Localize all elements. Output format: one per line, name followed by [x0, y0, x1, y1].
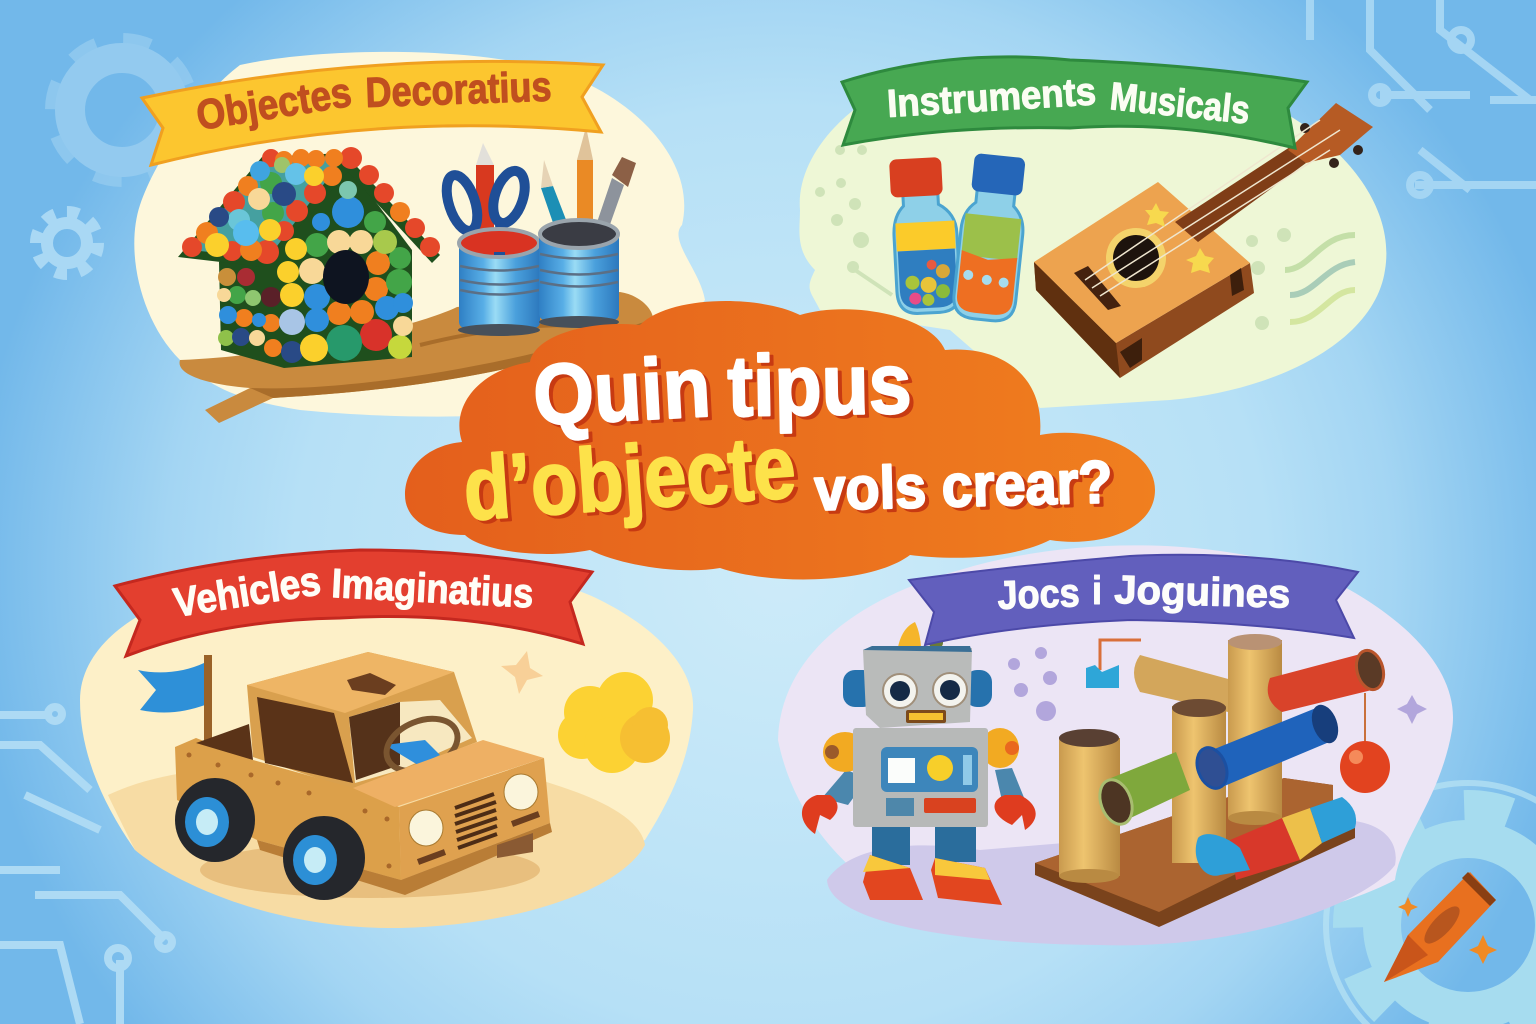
birdhouse: [178, 147, 440, 368]
panel: instruments musicals: [799, 57, 1386, 408]
panel: objectes decoratius: [134, 52, 705, 423]
circuit lines top right: [1310, 0, 1536, 195]
decorative dots and waves: [815, 145, 1355, 330]
panel: vehicles imaginatius: [80, 550, 693, 928]
red tube: [1268, 647, 1388, 712]
panel background: [134, 52, 705, 417]
robot feet: [863, 855, 1002, 905]
banner: jocs i joguines: i: [1092, 569, 1102, 613]
strings: [1085, 120, 1340, 296]
robot shoulders: [823, 728, 1019, 772]
robot legs: [872, 822, 976, 865]
paintbrush: [590, 157, 636, 247]
panel background: [799, 62, 1386, 408]
banner: objectes decoratius: Decoratius: [365, 63, 552, 116]
title: Quin: [531, 339, 713, 444]
robot: [802, 622, 1036, 905]
yellow splat: [558, 672, 670, 773]
wheel: front: [283, 816, 365, 900]
title: d’objecte: [460, 417, 799, 540]
cloud shape: [405, 301, 1155, 579]
banner: instruments musicals: Instruments: [886, 70, 1097, 126]
front panel: [399, 758, 550, 880]
icon: large gear top left: [56, 44, 188, 176]
central title cloud: [405, 301, 1155, 579]
banner: jocs i joguines: Jocs: [997, 571, 1080, 618]
panel: jocs i joguines: [778, 545, 1453, 945]
banner: vehicles imaginatius: [115, 550, 592, 656]
cardboard tube marble run: [1035, 634, 1390, 927]
banner: jocs i joguines: Joguines: [1114, 568, 1291, 617]
orange pencil: [577, 127, 593, 243]
banner: instruments musicals: Musicals: [1108, 75, 1252, 133]
bottle: red cap: [889, 156, 961, 315]
robot body: [853, 728, 988, 827]
wooden base: [1035, 778, 1355, 927]
scissors: [441, 167, 531, 250]
neck and headstock: [1175, 103, 1373, 242]
steering wheel: [379, 709, 465, 781]
side panel: [175, 738, 401, 880]
hood: [353, 740, 544, 807]
cardboard car: [138, 652, 552, 900]
sound hole: [1106, 228, 1166, 288]
red marker: [476, 143, 494, 235]
cigar box guitar: [1034, 103, 1373, 378]
panel background: [778, 545, 1453, 940]
small marble run icon: [1086, 640, 1141, 688]
title: [460, 336, 1113, 540]
headlights: [409, 774, 538, 846]
icon: crayon: [1384, 872, 1497, 982]
tan tube: front: [1059, 729, 1120, 883]
title: vols crear?: [814, 448, 1113, 523]
banner: jocs i joguines: [909, 555, 1358, 645]
tan tube: tall: [1228, 634, 1282, 825]
guitar stars: [1145, 203, 1214, 273]
grille: [455, 794, 497, 848]
robot head: [843, 622, 992, 728]
bottle: blue cap: [952, 152, 1031, 323]
sand ground: [108, 770, 645, 928]
right can: [539, 220, 619, 328]
icon: small gear left: [36, 212, 98, 274]
hanging ornament: [1340, 693, 1390, 793]
banner: instruments musicals: [842, 57, 1307, 148]
blue tube: [1192, 701, 1343, 793]
wooden shelf: [180, 292, 653, 423]
banner: vehicles imaginatius: Imaginatius: [331, 560, 535, 617]
circuit lines bottom left: [0, 707, 172, 1024]
teal pencil: [541, 160, 575, 246]
panel background: [80, 567, 693, 928]
striped tube: [1196, 797, 1356, 880]
decorative shapes: [1008, 647, 1427, 724]
wheel: rear: [175, 778, 255, 862]
green tube: [1094, 752, 1190, 829]
icon: large gear bottom right: [1326, 783, 1536, 1024]
robot arms and hands: [802, 768, 1036, 834]
rivets: [186, 752, 392, 868]
banner: vehicles imaginatius: Vehicles: [170, 557, 324, 626]
flag: [138, 655, 212, 750]
left can: [458, 229, 540, 336]
tan tube: horizontal: [1134, 655, 1232, 712]
star: [501, 651, 543, 694]
cabin: [247, 652, 477, 790]
tin cans with tools: [441, 127, 636, 336]
tan tube: middle: [1172, 699, 1226, 863]
title: tipus: [727, 336, 912, 435]
ground shadow: [827, 820, 1396, 945]
banner: objectes decoratius: Objectes: [193, 68, 354, 139]
banner: objectes decoratius: [142, 61, 603, 165]
